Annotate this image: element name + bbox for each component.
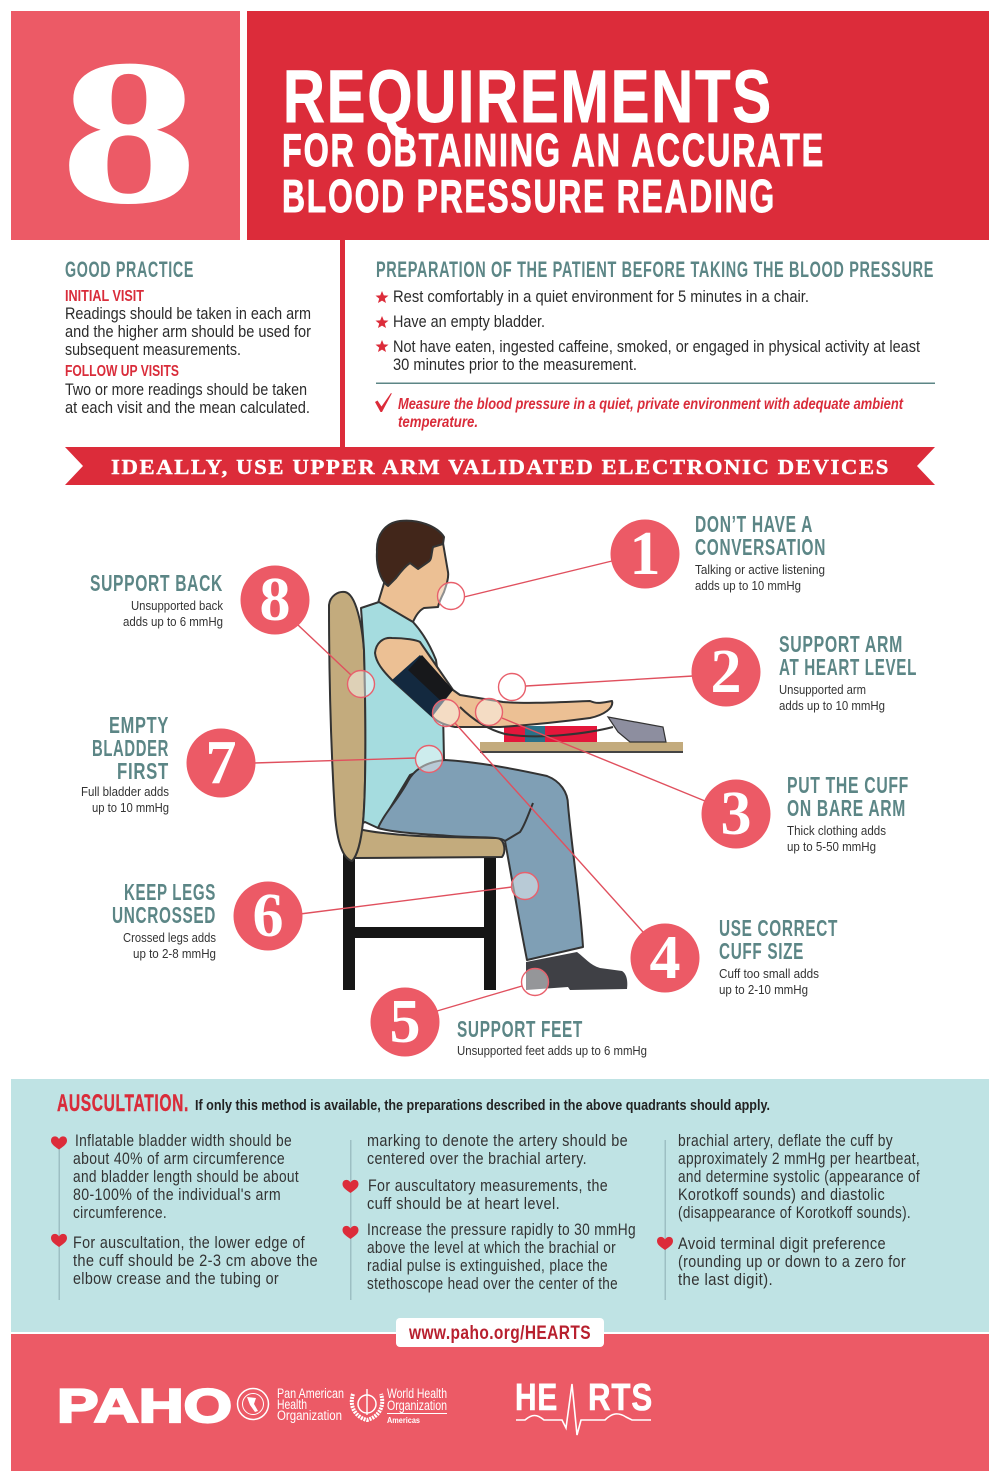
callout 3: 3	[720, 780, 752, 848]
logo: WHO	[352, 1386, 447, 1425]
website tag	[396, 1318, 604, 1347]
callout 7: EMPTY	[109, 712, 169, 738]
panel: good practice: GOOD PRACTICE	[65, 257, 194, 282]
auscultation column 3: Avoid terminal digit preference	[678, 1235, 886, 1253]
panel: good practice: at each visit and the mean calculated.	[65, 399, 310, 417]
callout 7: 7	[206, 729, 236, 797]
callout 4: USE CORRECT	[719, 915, 838, 941]
callout 5: SUPPORT FEET	[457, 1016, 583, 1042]
panel: patient preparation: 30 minutes prior to the measurement.	[393, 356, 637, 374]
callout 3: ON BARE ARM	[787, 795, 906, 821]
auscultation column 1: 80-100% of the individual's arm	[73, 1186, 281, 1204]
logo: HEARTS: RTS	[588, 1377, 653, 1419]
callout 3: PUT THE CUFF	[787, 772, 909, 798]
panel: patient preparation: Not have eaten, ingested caffeine, smoked, or engaged in physical activity at least	[393, 338, 920, 356]
auscultation column 2	[342, 1132, 636, 1300]
panel: good practice: INITIAL VISIT	[65, 288, 144, 305]
auscultation column 2: cuff should be at heart level.	[367, 1195, 560, 1213]
banner: IDEALLY, USE UPPER ARM VALIDATED ELECTRONIC DEVICES	[111, 455, 890, 479]
neck and head	[378, 530, 448, 622]
callout 7: Full bladder adds	[81, 784, 169, 799]
logo: PAHO: PAHO	[57, 1379, 232, 1432]
auscultation heading: AUSCULTATION.	[57, 1090, 189, 1117]
auscultation column 2: Increase the pressure rapidly to 30 mmHg	[367, 1221, 636, 1239]
callout 8: Unsupported back	[131, 598, 223, 613]
device box and table	[480, 717, 683, 753]
callout 4: Cuff too small adds	[719, 966, 819, 981]
callout 1: DON’T HAVE A	[695, 511, 813, 537]
auscultation column 3: the last digit).	[678, 1271, 773, 1289]
auscultation column 2: above the level at which the brachial or	[367, 1239, 616, 1257]
panel: good practice: Two or more readings should be taken	[65, 381, 307, 399]
panel: patient preparation: temperature.	[398, 414, 478, 431]
panel: auscultation	[11, 1079, 989, 1332]
panel: good practice: subsequent measurements.	[65, 341, 241, 359]
callout 1: 1	[630, 520, 660, 588]
auscultation column 1: Inflatable bladder width should be	[75, 1132, 292, 1150]
callout 1: Talking or active listening	[695, 562, 825, 577]
header: number panel	[11, 11, 240, 247]
callout 6: UNCROSSED	[112, 902, 216, 928]
arm	[375, 638, 612, 727]
auscultation column 1: elbow crease and the tubing or	[73, 1270, 279, 1288]
callout 3: Thick clothing adds	[787, 823, 886, 838]
banner	[65, 447, 935, 485]
callout 8: adds up to 6 mmHg	[123, 614, 223, 629]
blood pressure cuff	[392, 655, 453, 717]
auscultation column 1	[51, 1132, 318, 1300]
auscultation column 3: approximately 2 mmHg per heartbeat,	[678, 1150, 920, 1168]
callout 7	[81, 712, 256, 815]
auscultation heading: If only this method is available, the preparations described in the above quadrants should apply.	[195, 1097, 770, 1114]
chair	[329, 592, 504, 990]
logo: PAHO: Health	[277, 1397, 307, 1412]
auscultation column 2: centered over the brachial artery.	[367, 1150, 587, 1168]
callout 6: Crossed legs adds	[123, 930, 216, 945]
callout 5	[370, 988, 647, 1058]
callout 2	[692, 631, 917, 713]
hair	[377, 521, 444, 586]
column divider	[340, 240, 345, 448]
callout markers and leader lines	[254, 561, 705, 1011]
trousers	[378, 760, 583, 960]
logo: HEARTS	[515, 1377, 653, 1435]
header: number panel: 8	[60, 17, 198, 247]
auscultation column 3: and determine systolic (appearance of	[678, 1168, 920, 1186]
callout 3: up to 5-50 mmHg	[787, 839, 876, 854]
auscultation column 1: the cuff should be 2-3 cm above the	[73, 1252, 318, 1270]
callout 2: SUPPORT ARM	[779, 631, 903, 657]
auscultation column 2: For auscultatory measurements, the	[368, 1177, 608, 1195]
logo: WHO: Organization	[387, 1398, 447, 1413]
auscultation column 3: (rounding up or down to a zero for	[678, 1253, 906, 1271]
auscultation column 1: about 40% of arm circumference	[73, 1150, 285, 1168]
callout 7: up to 10 mmHg	[92, 800, 169, 815]
callout 6: 6	[252, 882, 284, 950]
auscultation column 3: Korotkoff sounds) and diastolic	[678, 1186, 885, 1204]
callout 2: Unsupported arm	[779, 682, 866, 697]
panel: good practice: and the higher arm should be used for	[65, 323, 311, 341]
panel: patient preparation: Have an empty bladder.	[393, 313, 545, 331]
panel: patient preparation: Rest comfortably in a quiet environment for 5 minutes in a chair.	[393, 288, 809, 306]
tube	[460, 707, 613, 736]
callout 8: 8	[260, 566, 290, 634]
logo: HEARTS: HE	[515, 1377, 558, 1419]
logo: PAHO: Pan American	[277, 1386, 344, 1401]
header: title panel: BLOOD PRESSURE READING	[282, 170, 776, 222]
auscultation column 3	[657, 1132, 920, 1300]
header: title panel: REQUIREMENTS	[283, 55, 773, 138]
callout 7: BLADDER	[92, 735, 169, 761]
callout 4: CUFF SIZE	[719, 938, 804, 964]
callout 5: 5	[390, 988, 420, 1056]
callout 7: FIRST	[117, 758, 169, 784]
callout 8: SUPPORT BACK	[90, 570, 223, 596]
auscultation column 2: stethoscope head over the center of the	[367, 1275, 618, 1293]
callout 5: Unsupported feet adds up to 6 mmHg	[457, 1043, 647, 1058]
callout 6: KEEP LEGS	[124, 879, 216, 905]
logo: WHO: World Health	[387, 1386, 447, 1401]
panel: good practice	[65, 257, 311, 417]
illustration: seated patient	[329, 521, 683, 990]
callout 8	[90, 566, 310, 634]
logo: WHO: Americas	[387, 1415, 420, 1425]
header: title panel	[247, 11, 989, 240]
auscultation column 2: marking to denote the artery should be	[367, 1132, 628, 1150]
auscultation column 3: (disappearance of Korotkoff sounds).	[678, 1204, 911, 1222]
website tag: www.paho.org/HEARTS	[408, 1323, 591, 1344]
callout 1: CONVERSATION	[695, 534, 826, 560]
callout 2: 2	[710, 638, 742, 706]
torso shirt	[361, 602, 444, 828]
logo: PAHO: Organization	[277, 1408, 342, 1423]
panel: good practice: Readings should be taken in each arm	[65, 305, 311, 323]
logo: PAHO	[57, 1379, 344, 1432]
callout 6: up to 2-8 mmHg	[133, 946, 216, 961]
callout 1: adds up to 10 mmHg	[695, 578, 801, 593]
shoe	[526, 952, 627, 990]
callout 2: adds up to 10 mmHg	[779, 698, 885, 713]
callout 4	[630, 915, 838, 997]
callout 4: 4	[650, 924, 680, 992]
auscultation column 3: brachial artery, deflate the cuff by	[678, 1132, 893, 1150]
callout 4: up to 2-10 mmHg	[719, 982, 808, 997]
auscultation heading	[57, 1090, 770, 1117]
callout 6	[112, 879, 302, 961]
callout 1	[610, 511, 826, 593]
auscultation column 1: For auscultation, the lower edge of	[73, 1234, 305, 1252]
auscultation column 1: circumference.	[73, 1204, 167, 1222]
panel: good practice: FOLLOW UP VISITS	[65, 363, 179, 380]
auscultation column 2: radial pulse is extinguished, place the	[367, 1257, 608, 1275]
footer	[11, 1318, 989, 1471]
callout 3	[702, 772, 909, 854]
callout 2: AT HEART LEVEL	[779, 654, 917, 680]
auscultation column 1: and bladder length should be about	[73, 1168, 299, 1186]
panel: patient preparation	[375, 257, 935, 431]
